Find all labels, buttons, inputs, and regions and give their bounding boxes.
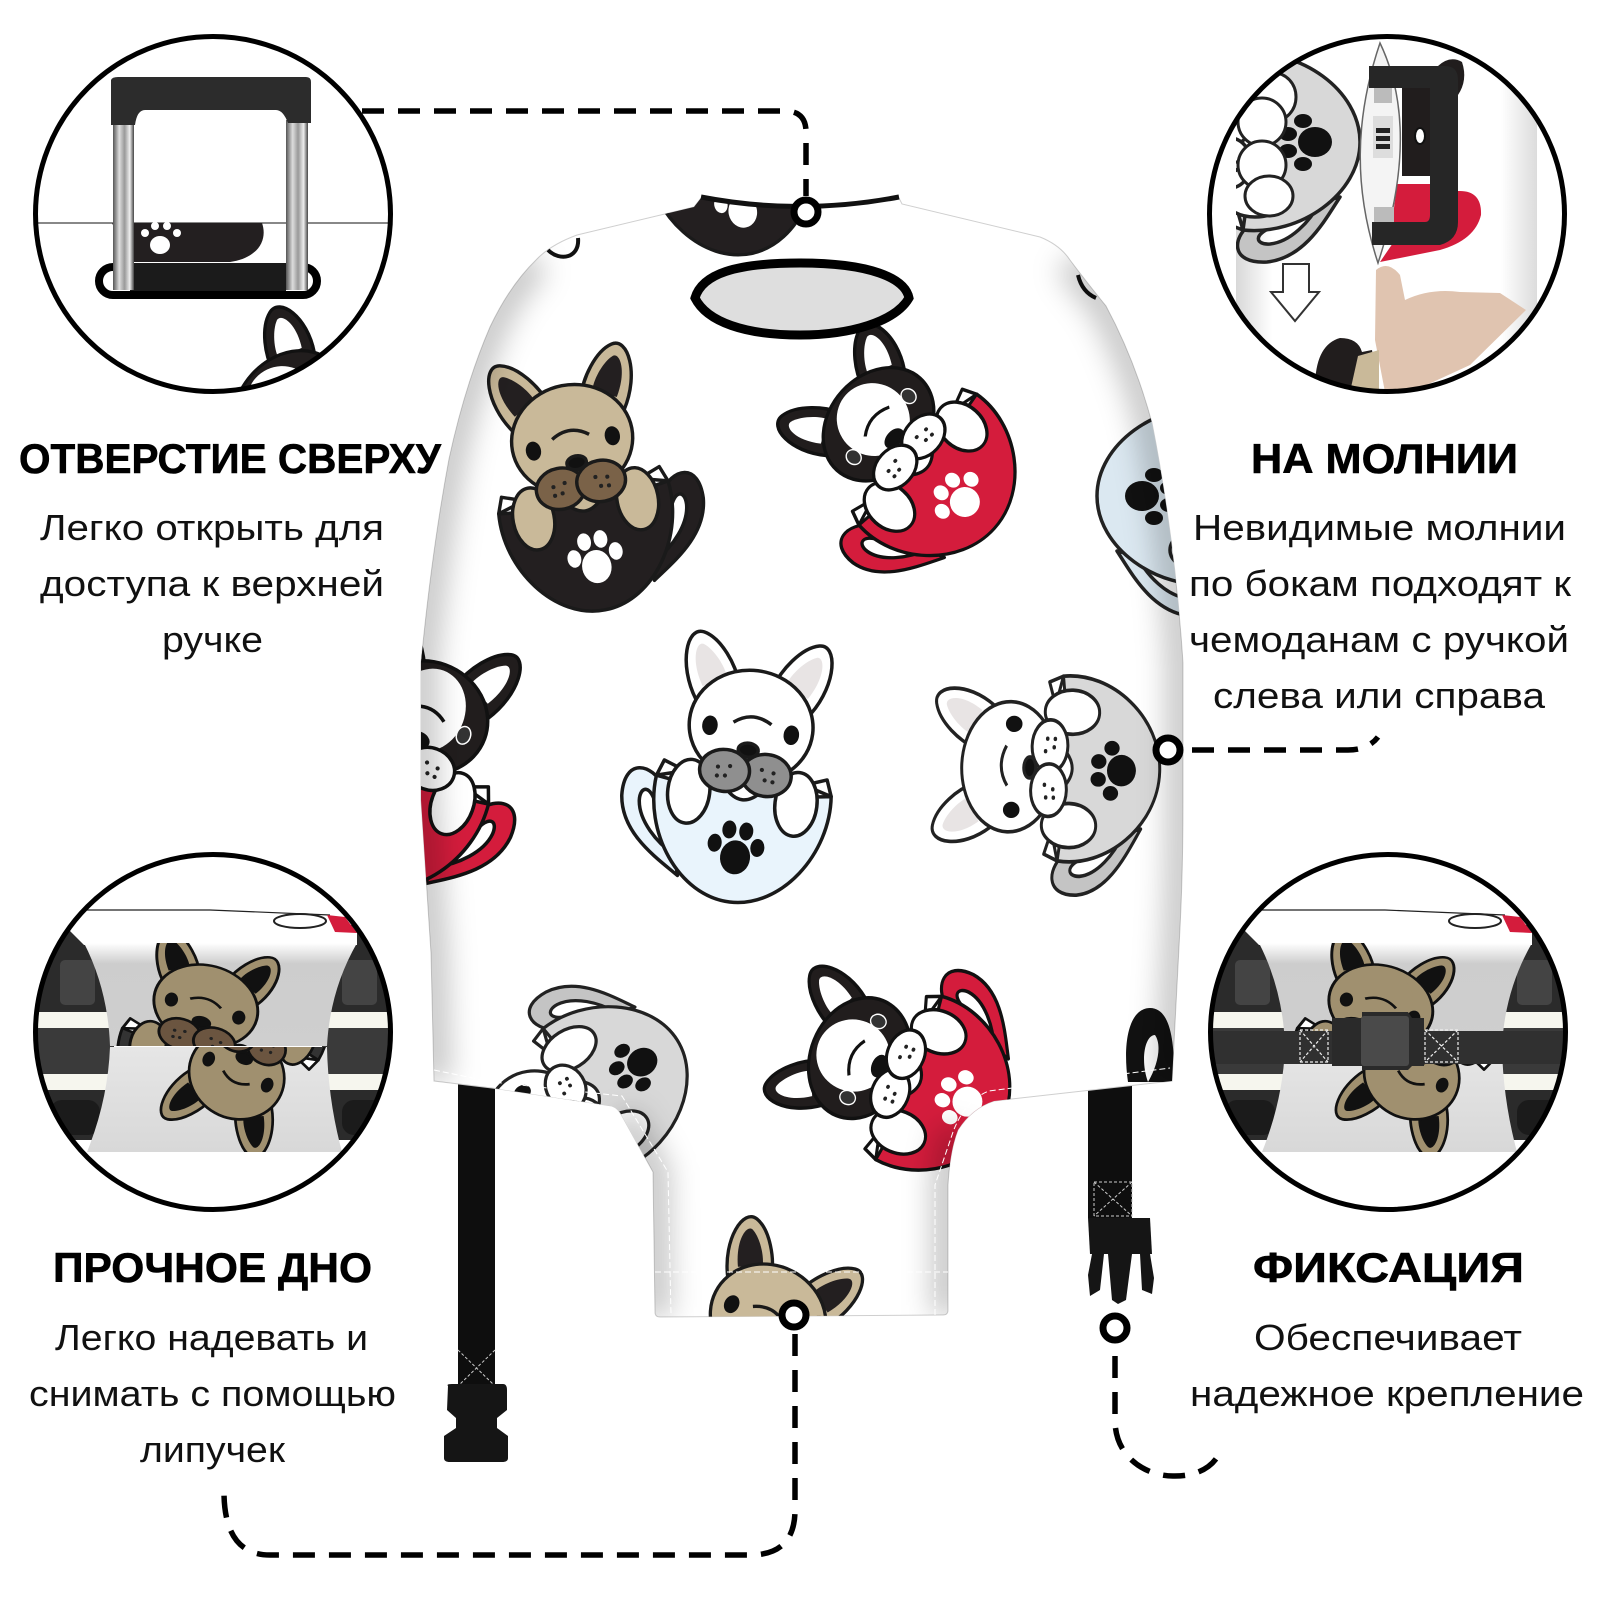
strap: right with buckle — [1088, 1084, 1154, 1304]
dog: white in grey cup — [930, 671, 1163, 898]
circle frame — [1210, 854, 1566, 1210]
panel: bottom detail — [30, 854, 398, 1210]
handle opening — [695, 263, 909, 335]
lower dog — [1298, 911, 1531, 1166]
marker: zipper — [1156, 738, 1180, 762]
heading: ФИКСАЦИЯ — [1253, 1244, 1524, 1291]
callout: top opening line — [362, 111, 806, 196]
dog in grey cup — [1236, 62, 1361, 264]
black cup fragment — [112, 223, 264, 262]
line 2: снимать с помощью — [29, 1373, 396, 1414]
upper dog — [100, 925, 321, 1155]
line 2: доступа к верхней — [40, 563, 384, 604]
dog: boston in red cup, lower — [762, 964, 1012, 1172]
hand — [1375, 266, 1526, 392]
text block: top opening — [19, 435, 442, 660]
fabric sheet — [69, 910, 357, 1152]
muzzle and paws close-up — [1238, 73, 1296, 216]
upper dog — [1275, 925, 1496, 1155]
cup: blue on right edge — [1095, 418, 1180, 616]
zipper opening — [1360, 43, 1400, 263]
circle frame — [1210, 36, 1564, 392]
text block: zipper — [1189, 435, 1571, 716]
belt stitching — [1300, 1030, 1458, 1062]
heading: ОТВЕРСТИЕ СВЕРХУ — [19, 435, 442, 482]
line 1: Обеспечивает — [1254, 1317, 1522, 1358]
line 2: по бокам подходят к — [1189, 563, 1571, 604]
luggage side handle — [1369, 66, 1458, 245]
text block: fastening — [1190, 1244, 1584, 1414]
callout: zipper line — [1192, 737, 1378, 750]
handle slot — [99, 267, 317, 295]
line 4: слева или справа — [1213, 675, 1546, 716]
red cup — [1380, 184, 1481, 262]
line 1: Легко надевать и — [55, 1317, 368, 1358]
circle frame — [36, 854, 390, 1210]
line 3: чемоданам с ручкой — [1189, 619, 1569, 660]
panel: top handle detail — [33, 34, 393, 394]
line 1: Невидимые молнии — [1193, 507, 1566, 548]
belt — [1205, 1031, 1571, 1064]
heading: НА МОЛНИИ — [1251, 435, 1518, 482]
heading: ПРОЧНОЕ ДНО — [53, 1244, 372, 1291]
dog: boston in red cup, upper — [776, 326, 1017, 574]
left rod — [113, 120, 134, 290]
slot bar — [130, 263, 286, 291]
panel: zipper detail — [1207, 34, 1567, 394]
cup handle: small top right — [1078, 275, 1096, 298]
line 1: Легко открыть для — [40, 507, 384, 548]
luggage wheels — [30, 925, 398, 1140]
panel: fastening detail — [1205, 854, 1573, 1210]
cover silhouette — [421, 198, 1183, 1317]
boston dog behind handle — [1402, 86, 1432, 176]
line 2: надежное крепление — [1190, 1373, 1584, 1414]
neck binding — [701, 197, 899, 206]
marker: top opening — [794, 200, 818, 224]
marker: bottom — [782, 1303, 806, 1327]
horizon line — [38, 222, 388, 224]
eye — [1415, 128, 1425, 144]
seam stitching — [434, 1068, 1170, 1315]
circle frame — [36, 36, 390, 392]
dog: boston on left edge — [421, 646, 522, 886]
pattern: dogs in cups — [283, 0, 1362, 1520]
buckle — [1332, 1012, 1424, 1070]
line 3: ручке — [162, 619, 263, 660]
callout: bottom line — [224, 1334, 795, 1555]
dog: tan in black cup — [486, 341, 706, 613]
panel: luggage cover — [420, 194, 1184, 1318]
strap: left — [444, 1082, 508, 1462]
dog: tan at bottom — [708, 1215, 864, 1317]
handle grip — [111, 77, 311, 125]
paw print — [141, 222, 181, 254]
text block: bottom — [29, 1244, 396, 1470]
wheels and sheet — [1205, 910, 1573, 1152]
cup handle: black lower right — [1126, 1008, 1174, 1082]
edge shading — [421, 260, 1183, 1317]
black ear — [1438, 59, 1464, 95]
dog: white in grey cup, lower left — [495, 984, 689, 1158]
tan fragment — [1352, 350, 1379, 389]
combination lock — [1373, 85, 1394, 223]
lower dog — [123, 911, 356, 1166]
marker: fastening — [1103, 1316, 1127, 1340]
fabric band — [1236, 90, 1537, 338]
buckle face — [1361, 1016, 1409, 1066]
down arrow — [1271, 264, 1319, 321]
cup: black at neck — [665, 198, 799, 256]
lower dog cup — [1316, 338, 1372, 386]
cup handle: small top left — [548, 238, 578, 257]
line 3: липучек — [140, 1429, 285, 1470]
callout: fastening line — [1115, 1356, 1221, 1476]
right rod — [286, 120, 308, 290]
dog peeking — [241, 305, 320, 387]
dog: white in blue cup — [620, 630, 834, 904]
